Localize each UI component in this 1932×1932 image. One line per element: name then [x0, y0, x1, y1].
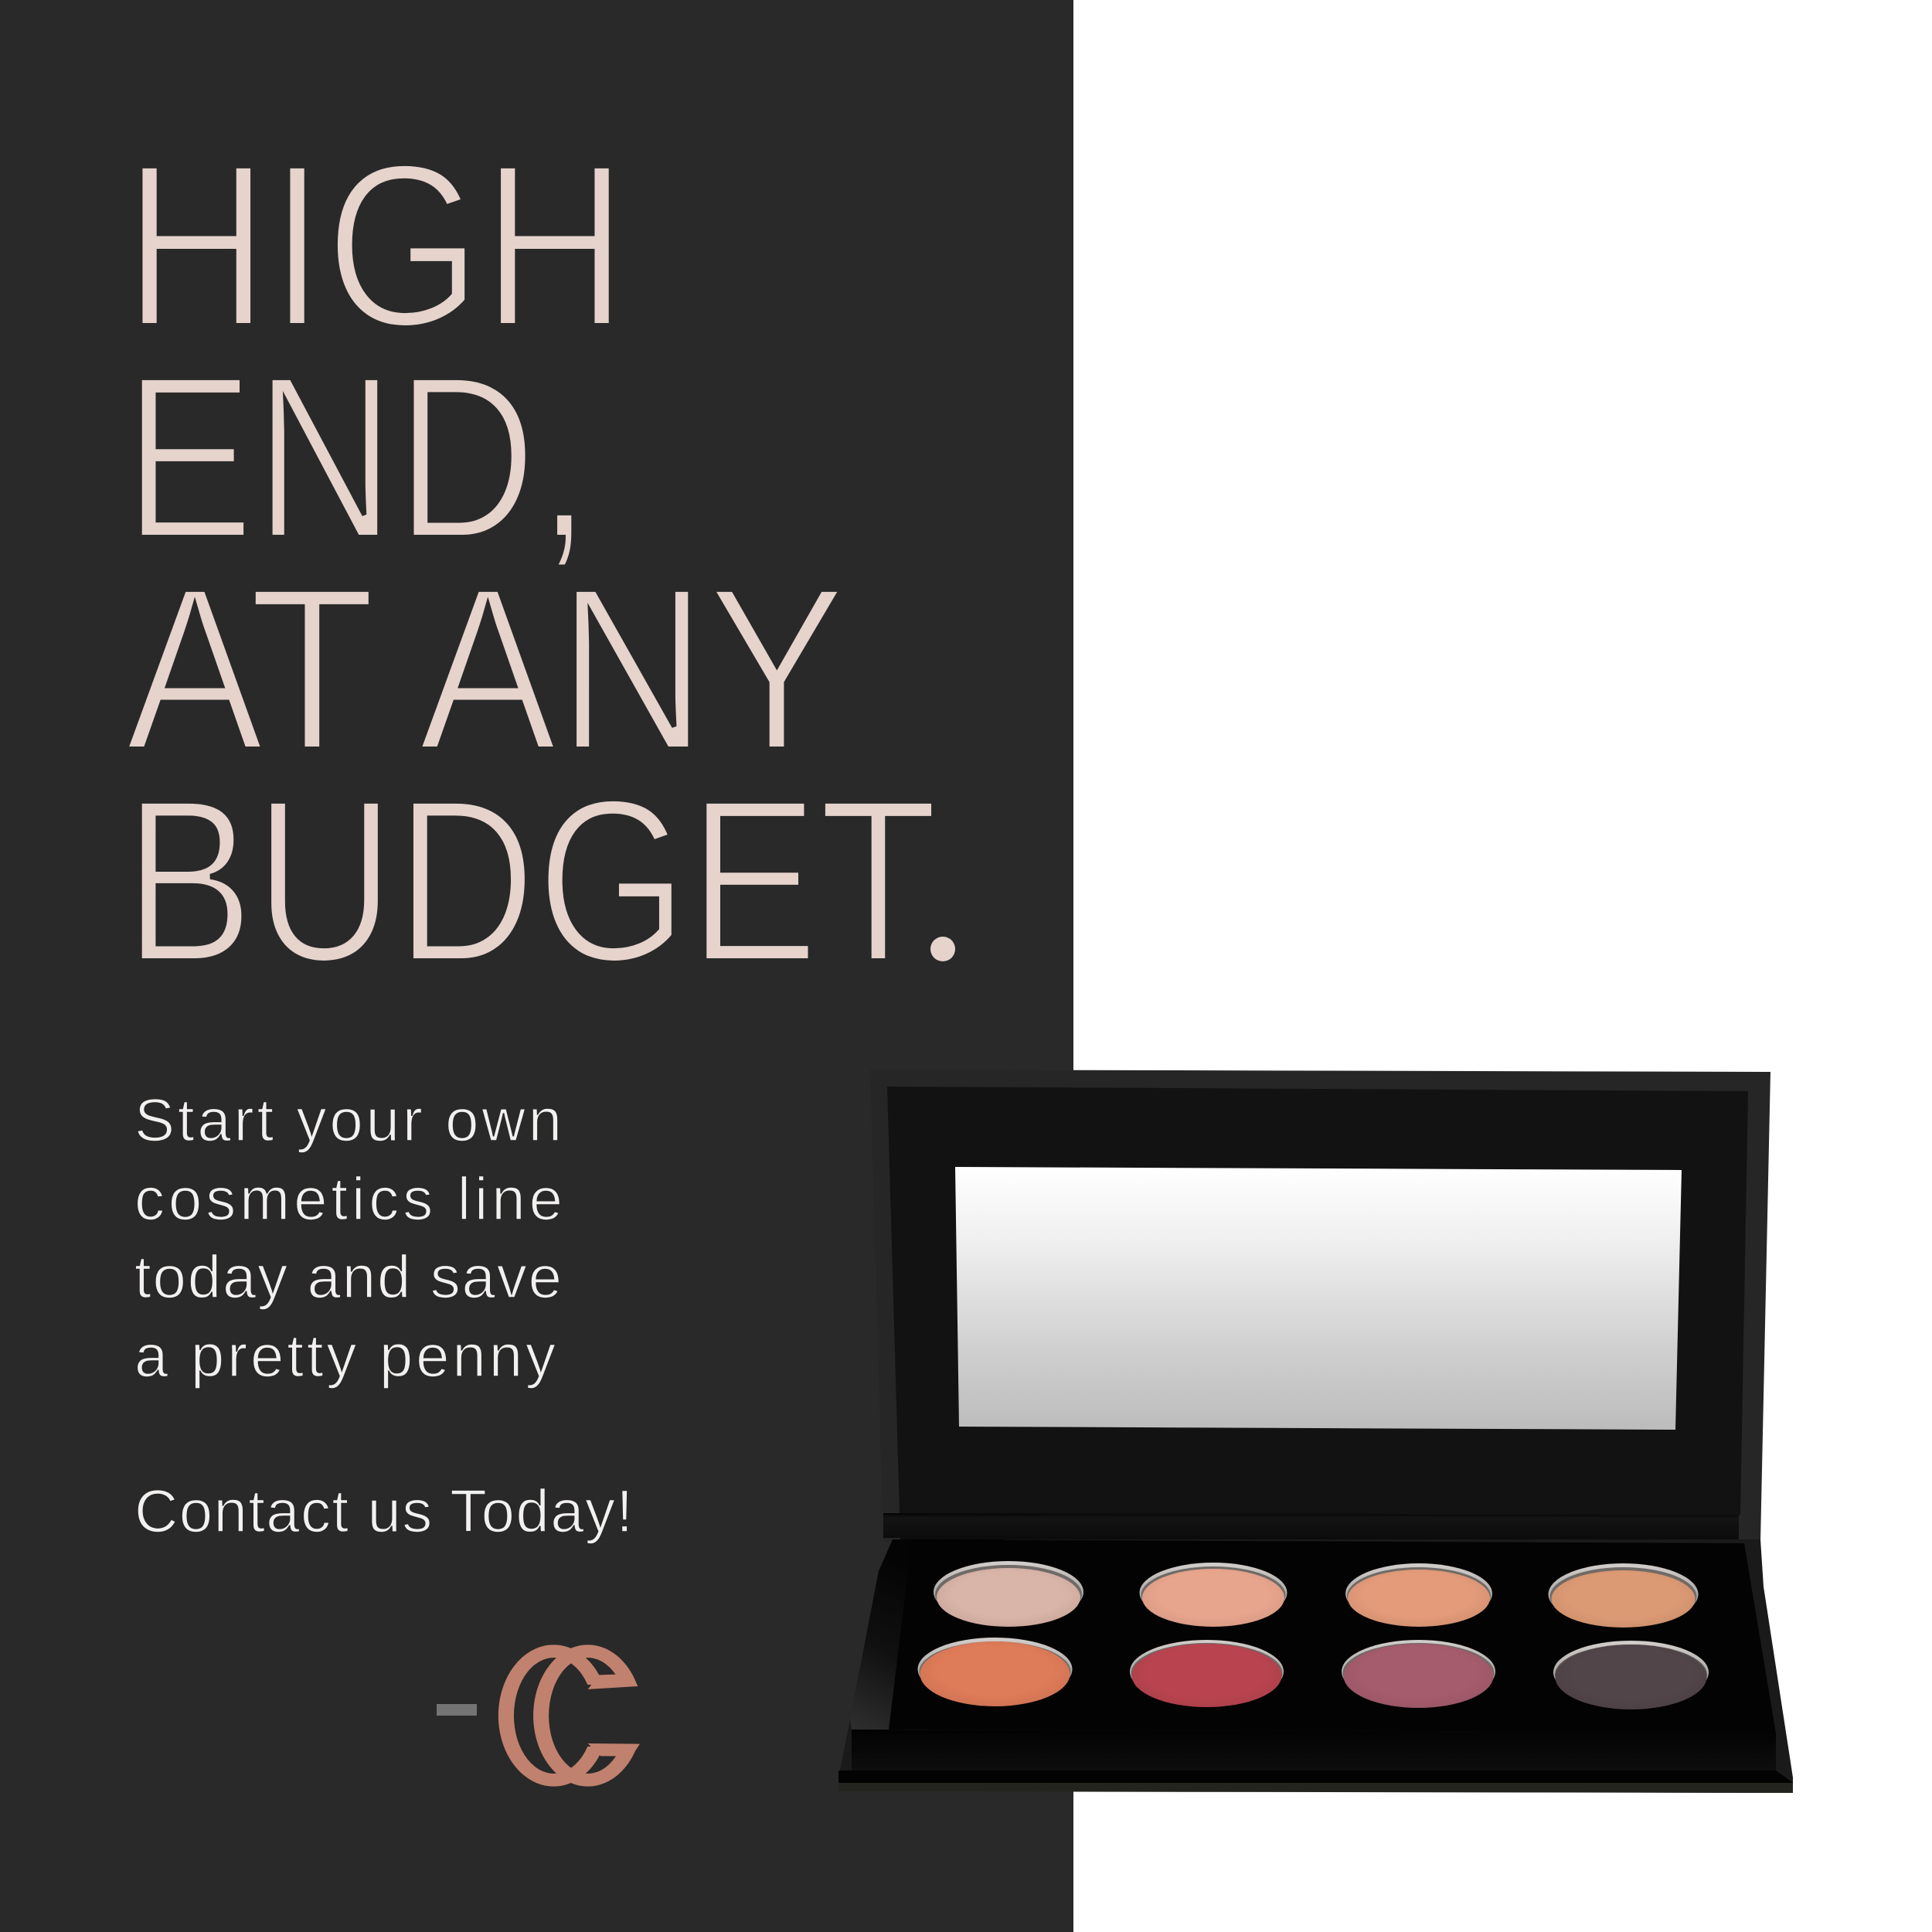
- text block: pitch: Start your own: [134, 1086, 562, 1154]
- text block: pitch: [134, 1086, 563, 1389]
- title: AT ANY: [125, 539, 846, 799]
- text block: pitch: a pretty penny: [134, 1321, 556, 1389]
- eyeshadow pan 2: [1139, 1563, 1287, 1627]
- eyeshadow pan 3: [1345, 1563, 1492, 1627]
- eyeshadow pan 6: [1130, 1640, 1284, 1707]
- title: BUDGET.: [124, 751, 971, 1011]
- title: [124, 116, 971, 1011]
- lid mirror: [955, 1167, 1682, 1430]
- product: eyeshadow palette: [838, 1070, 1793, 1793]
- text block: contact call to action: Contact us Today!: [134, 1477, 633, 1545]
- eyeshadow pan 5: [918, 1638, 1073, 1706]
- panel: dark left column: [0, 0, 1073, 1932]
- eyeshadow pan 1: [934, 1561, 1083, 1627]
- eyeshadow pan 4: [1549, 1563, 1699, 1628]
- icon: CC logo: [498, 1645, 640, 1787]
- title: END,: [124, 328, 591, 587]
- eyeshadow pan 8: [1553, 1641, 1709, 1709]
- signature dash: [437, 1704, 477, 1716]
- hinge: [883, 1513, 1739, 1543]
- title: HIGH: [124, 116, 628, 376]
- text block: pitch: today and save: [134, 1243, 562, 1311]
- eyeshadow pan 7: [1342, 1640, 1495, 1708]
- text block: pitch: cosmetics line: [134, 1165, 563, 1233]
- palette base: [838, 1539, 1793, 1793]
- palette lid: [870, 1070, 1770, 1542]
